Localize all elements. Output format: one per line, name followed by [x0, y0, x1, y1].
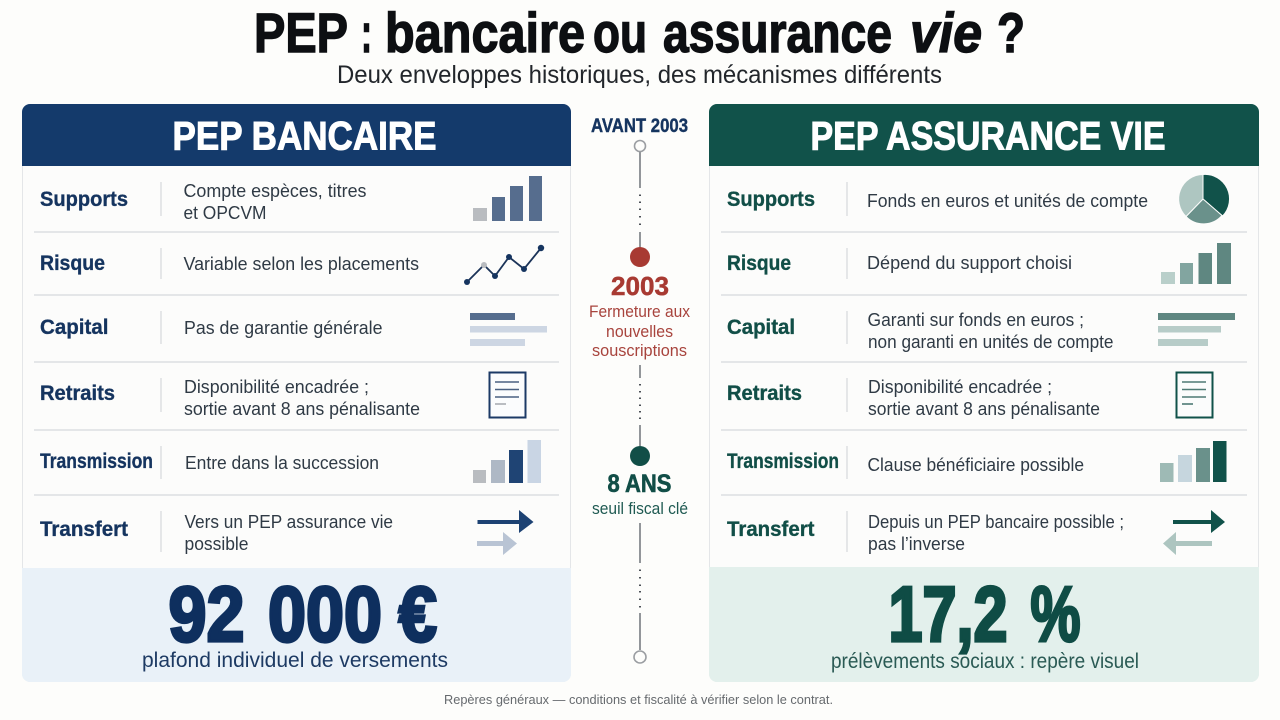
row: Retraits — [727, 372, 1212, 419]
title: assurance — [663, 1, 892, 64]
icon: bar chart — [1161, 243, 1231, 284]
milestone: 2003: souscriptions — [592, 341, 687, 360]
callout: 17,2 %: 17,2 — [888, 570, 1008, 658]
row: Supports: et OPCVM — [184, 202, 266, 223]
row: Retraits: Disponibilité encadrée ; — [184, 376, 369, 397]
milestone: 8 ans: 8 ANS — [608, 470, 672, 498]
title: vie — [910, 1, 982, 64]
callout: 17,2 %: prélèvements sociaux : repère visuel — [831, 649, 1139, 673]
title: : — [361, 1, 372, 64]
row: Transfert: Transfert — [40, 517, 128, 541]
row: Retraits: sortie avant 8 ans pénalisante — [184, 398, 420, 419]
row: Supports: Compte espèces, titres — [184, 180, 366, 201]
row: Transmission: Entre dans la succession — [185, 452, 379, 473]
row: Capital: Capital — [40, 315, 108, 339]
panel header: PEP bancaire — [22, 104, 571, 166]
callout: 92 000 €: 92 — [168, 570, 244, 658]
title: bancaire — [385, 1, 585, 64]
row: Risque: Risque — [727, 251, 791, 275]
row: Risque — [40, 245, 544, 285]
timeline end marker — [634, 651, 646, 663]
row: Risque: Dépend du support choisi — [867, 252, 1072, 273]
icon: pie chart — [1179, 174, 1230, 224]
row: Transmission: Transmission — [40, 449, 153, 473]
label: avant 2003: AVANT 2003 — [591, 116, 688, 137]
callout: 17,2 %: % — [1030, 570, 1080, 658]
icon: bar chart — [473, 440, 541, 483]
timeline — [589, 116, 690, 663]
milestone: 2003 — [589, 247, 690, 360]
title: ou — [593, 1, 647, 64]
row: Transfert — [40, 510, 534, 555]
row: Transfert: Vers un PEP assurance vie — [184, 511, 393, 532]
callout: 92 000 €: € — [398, 570, 437, 658]
icon: arrows — [1163, 510, 1225, 555]
row: Transfert: Depuis un PEP bancaire possible ; — [868, 511, 1124, 532]
title: PEP — [254, 1, 348, 64]
callout: 92 000 € — [22, 568, 571, 682]
milestone: 2003: nouvelles — [606, 322, 673, 341]
row: Risque — [727, 243, 1231, 284]
callout: 17,2 % — [709, 567, 1259, 682]
icon: bar chart — [473, 176, 542, 221]
icon: document — [490, 372, 526, 418]
row: Retraits — [40, 372, 526, 419]
row: Retraits: Disponibilité encadrée ; — [868, 376, 1052, 397]
row: Supports — [727, 174, 1230, 224]
callout: 92 000 €: plafond individuel de versements — [142, 648, 448, 672]
icon: bar chart — [1160, 441, 1226, 482]
icon: horizontal bars — [470, 313, 547, 346]
icon: arrows — [477, 510, 534, 555]
row: Transfert: pas l’inverse — [868, 533, 965, 554]
title: ? — [997, 1, 1025, 64]
milestone: 8 ans: seuil fiscal clé — [592, 499, 688, 518]
icon: horizontal bars — [1158, 313, 1235, 346]
row: Supports: Supports — [727, 187, 815, 211]
milestone: 2003: 2003 — [611, 271, 669, 301]
row: Supports: Supports — [40, 187, 128, 211]
label: avant 2003 — [591, 116, 688, 152]
row: Retraits: sortie avant 8 ans pénalisante — [868, 398, 1100, 419]
row: Transfert — [727, 510, 1225, 555]
panel header: PEP bancaire: PEP BANCAIRE — [172, 114, 436, 158]
row: Capital: Capital — [727, 315, 795, 339]
row: Capital: Garanti sur fonds en euros ; — [868, 309, 1084, 330]
row: Transmission — [40, 440, 541, 483]
row: Capital — [727, 309, 1235, 352]
row: Capital — [40, 313, 547, 346]
icon: line chart — [464, 245, 544, 285]
icon: document — [1176, 372, 1212, 418]
row: Capital: Pas de garantie générale — [184, 317, 382, 338]
row: Retraits: Retraits — [727, 381, 802, 405]
milestone: 2003: Fermeture aux — [589, 302, 690, 321]
row: Retraits: Retraits — [40, 381, 115, 405]
row: Risque: Variable selon les placements — [184, 253, 419, 274]
panel: PEP bancaire — [22, 104, 571, 682]
row: Transfert: possible — [184, 533, 248, 554]
callout: 92 000 €: 000 — [268, 570, 382, 658]
panel: PEP assurance vie — [709, 104, 1259, 682]
panel header: PEP assurance vie — [709, 104, 1259, 166]
row: Risque: Risque — [40, 251, 105, 275]
row: Transmission: Clause bénéficiaire possible — [868, 454, 1084, 475]
subtitle: Deux enveloppes historiques, des mécanismes différents — [337, 61, 942, 89]
row: Supports: Fonds en euros et unités de compte — [867, 190, 1148, 211]
footnote: Repères généraux — conditions et fiscalité à vérifier selon le contrat. — [444, 692, 833, 707]
row: Transmission: Transmission — [727, 449, 839, 473]
panel header: PEP assurance vie: PEP ASSURANCE VIE — [810, 114, 1166, 158]
title — [254, 1, 1025, 64]
row: Transfert: Transfert — [727, 517, 814, 541]
row: Capital: non garanti en unités de compte — [868, 331, 1114, 352]
row: Supports — [40, 176, 542, 223]
milestone: 8 ans — [592, 446, 688, 518]
row: Transmission — [727, 441, 1226, 482]
